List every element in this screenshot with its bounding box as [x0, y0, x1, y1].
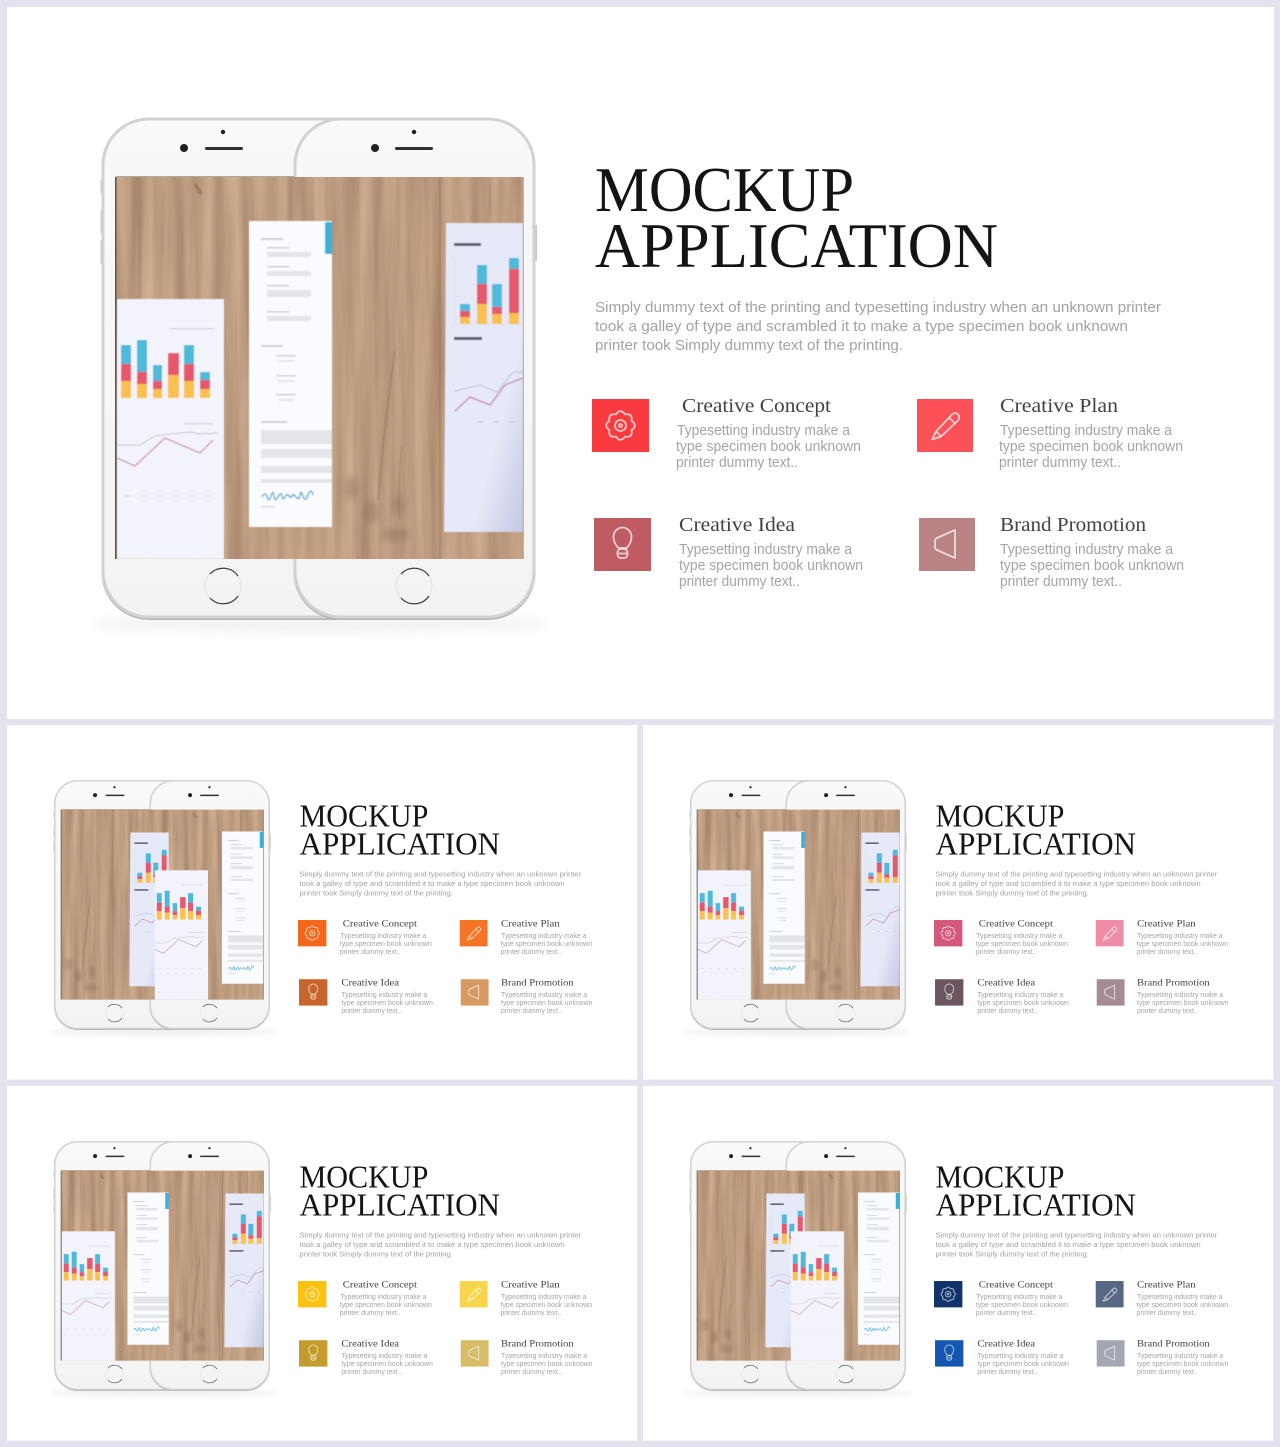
- item: creative plan: Typesetting industry make a: [501, 931, 587, 940]
- intro text: printer took Simply dummy text of the printing.: [300, 889, 453, 898]
- intro text: took a galley of type and scrambled it to make a type specimen book unknown: [936, 1240, 1201, 1249]
- item: creative plan: printer dummy text..: [501, 947, 561, 956]
- title: MOCKUP: [936, 798, 1064, 833]
- title: MOCKUP: [300, 1159, 428, 1194]
- intro text: Simply dummy text of the printing and typesetting industry when an unknown printer: [595, 299, 1161, 316]
- icon: gear: [298, 920, 326, 946]
- icon: light bulb: [935, 979, 963, 1006]
- item: creative concept: [340, 1279, 432, 1317]
- icon: light bulb: [935, 1340, 963, 1367]
- item: creative plan: [501, 1279, 592, 1317]
- item: creative plan: Typesetting industry make a: [1137, 1292, 1223, 1301]
- intro text: Simply dummy text of the printing and typesetting industry when an unknown printer: [300, 1231, 582, 1240]
- item: brand promotion: Typesetting industry make a: [1000, 542, 1174, 558]
- item: creative idea: printer dummy text..: [679, 574, 800, 590]
- intro text: Simply dummy text of the printing and typesetting industry when an unknown printer: [936, 1231, 1218, 1240]
- item: creative plan: type specimen book unknown: [1137, 939, 1228, 948]
- item: creative idea: [341, 978, 433, 1015]
- item: brand promotion: printer dummy text..: [1137, 1367, 1198, 1376]
- item: creative idea: Typesetting industry make a: [341, 990, 427, 999]
- item: creative idea: Typesetting industry make a: [977, 990, 1063, 999]
- item: creative idea: printer dummy text..: [341, 1006, 402, 1015]
- item: brand promotion: printer dummy text..: [1137, 1006, 1198, 1015]
- item: creative plan: type specimen book unknown: [999, 439, 1183, 455]
- item: creative idea: type specimen book unknown: [341, 998, 433, 1007]
- item: creative idea: Creative Idea: [679, 515, 795, 536]
- item: creative plan: Creative Plan: [501, 918, 560, 929]
- item: creative idea: Typesetting industry make a: [341, 1351, 427, 1360]
- icon: pencil: [1096, 920, 1124, 946]
- item: creative concept: printer dummy text..: [976, 1308, 1037, 1317]
- item: creative concept: type specimen book unknown: [340, 1300, 432, 1309]
- intro text: took a galley of type and scrambled it to make a type specimen book unknown: [936, 879, 1201, 888]
- item: brand promotion: [501, 978, 593, 1015]
- panel: pink slide: [643, 725, 1273, 1080]
- item: creative concept: type specimen book unknown: [976, 939, 1068, 948]
- item: creative plan: Creative Plan: [501, 1279, 560, 1290]
- item: creative plan: Creative Plan: [1137, 918, 1196, 929]
- item: creative idea: Creative Idea: [977, 978, 1036, 989]
- icon: megaphone: [919, 518, 975, 571]
- intro text: [936, 870, 1218, 898]
- title: [936, 798, 1136, 861]
- item: creative concept: Typesetting industry make a: [976, 931, 1062, 940]
- item: brand promotion: Brand Promotion: [1137, 1339, 1210, 1350]
- item: brand promotion: Typesetting industry make a: [1137, 990, 1223, 999]
- intro text: printer took Simply dummy text of the printing.: [300, 1250, 453, 1259]
- item: creative concept: Typesetting industry make a: [677, 423, 851, 439]
- intro text: printer took Simply dummy text of the printing.: [936, 1250, 1089, 1259]
- item: brand promotion: [1137, 978, 1229, 1015]
- item: creative plan: printer dummy text..: [999, 455, 1121, 471]
- item: creative concept: Creative Concept: [979, 1279, 1053, 1290]
- item: creative concept: Creative Concept: [682, 396, 832, 417]
- item: creative plan: [999, 396, 1183, 471]
- item: creative idea: Typesetting industry make a: [679, 542, 853, 558]
- item: creative concept: Creative Concept: [343, 1279, 417, 1290]
- icon: megaphone: [1097, 1340, 1125, 1367]
- icon: pencil: [1096, 1281, 1124, 1307]
- item: creative concept: type specimen book unknown: [676, 439, 861, 455]
- phone mockup pair: [0, 781, 357, 1036]
- item: creative idea: [679, 515, 863, 590]
- item: creative concept: Typesetting industry make a: [340, 931, 426, 940]
- intro text: printer took Simply dummy text of the printing.: [936, 889, 1089, 898]
- item: creative plan: Typesetting industry make a: [1137, 931, 1223, 940]
- item: brand promotion: type specimen book unknown: [501, 1359, 593, 1368]
- item: creative plan: printer dummy text..: [501, 1308, 561, 1317]
- item: brand promotion: Brand Promotion: [1000, 515, 1146, 536]
- icon: pencil: [460, 1281, 488, 1307]
- icon: megaphone: [461, 979, 489, 1006]
- item: creative plan: type specimen book unknown: [1137, 1300, 1228, 1309]
- item: creative idea: printer dummy text..: [341, 1367, 402, 1376]
- icon: gear: [298, 1281, 326, 1307]
- item: creative concept: Creative Concept: [343, 918, 417, 929]
- intro text: took a galley of type and scrambled it to make a type specimen book unknown: [300, 1240, 565, 1249]
- item: brand promotion: type specimen book unknown: [501, 998, 593, 1007]
- item: creative concept: printer dummy text..: [676, 455, 798, 471]
- intro text: took a galley of type and scrambled it to make a type specimen book unknown: [595, 318, 1128, 335]
- item: creative plan: type specimen book unknown: [501, 1300, 592, 1309]
- item: creative plan: printer dummy text..: [1137, 947, 1197, 956]
- intro text: [595, 299, 1161, 354]
- item: brand promotion: [1000, 515, 1184, 590]
- item: creative plan: Creative Plan: [1000, 396, 1118, 417]
- item: creative plan: [501, 918, 592, 956]
- icon: gear: [592, 399, 649, 452]
- item: creative plan: Typesetting industry make a: [501, 1292, 587, 1301]
- item: brand promotion: printer dummy text..: [501, 1367, 562, 1376]
- item: brand promotion: type specimen book unknown: [1137, 998, 1229, 1007]
- item: creative concept: Typesetting industry make a: [340, 1292, 426, 1301]
- icon: light bulb: [594, 518, 651, 571]
- item: brand promotion: Brand Promotion: [501, 978, 574, 989]
- intro text: [300, 1231, 582, 1259]
- item: creative concept: [976, 1279, 1068, 1317]
- intro text: [300, 870, 582, 898]
- panel: navy slide: [588, 1086, 1273, 1441]
- phone mockup pair: [683, 781, 914, 1036]
- icon: light bulb: [299, 979, 327, 1006]
- item: brand promotion: Typesetting industry make a: [1137, 1351, 1223, 1360]
- icon: light bulb: [299, 1340, 327, 1367]
- intro text: Simply dummy text of the printing and typesetting industry when an unknown printer: [300, 870, 582, 879]
- item: creative idea: type specimen book unknown: [977, 998, 1069, 1007]
- item: creative concept: Typesetting industry make a: [976, 1292, 1062, 1301]
- item: brand promotion: type specimen book unknown: [1000, 558, 1184, 574]
- item: brand promotion: [1137, 1339, 1229, 1376]
- item: creative idea: [341, 1339, 433, 1376]
- item: brand promotion: printer dummy text..: [1000, 574, 1122, 590]
- item: brand promotion: Brand Promotion: [1137, 978, 1210, 989]
- item: creative plan: [1137, 1279, 1228, 1317]
- item: creative idea: Creative Idea: [341, 978, 400, 989]
- title: APPLICATION: [300, 1187, 500, 1222]
- item: brand promotion: Typesetting industry make a: [501, 1351, 587, 1360]
- item: creative concept: printer dummy text..: [340, 1308, 401, 1317]
- title: MOCKUP: [595, 154, 854, 225]
- item: brand promotion: printer dummy text..: [501, 1006, 562, 1015]
- title: [595, 154, 998, 281]
- item: creative idea: type specimen book unknown: [341, 1359, 433, 1368]
- item: creative concept: printer dummy text..: [976, 947, 1037, 956]
- item: creative plan: [1137, 918, 1228, 956]
- item: brand promotion: Typesetting industry make a: [501, 990, 587, 999]
- intro text: took a galley of type and scrambled it to make a type specimen book unknown: [300, 879, 565, 888]
- item: creative idea: Typesetting industry make a: [977, 1351, 1063, 1360]
- icon: pencil: [460, 920, 488, 946]
- item: creative plan: type specimen book unknown: [501, 939, 592, 948]
- icon: megaphone: [1097, 979, 1125, 1006]
- item: creative concept: printer dummy text..: [340, 947, 401, 956]
- item: creative plan: Creative Plan: [1137, 1279, 1196, 1290]
- panel: yellow slide: [7, 1086, 637, 1441]
- intro text: printer took Simply dummy text of the printing.: [595, 337, 903, 354]
- title: MOCKUP: [300, 798, 428, 833]
- item: creative idea: printer dummy text..: [977, 1006, 1038, 1015]
- item: creative idea: Creative Idea: [977, 1339, 1036, 1350]
- title: [300, 1159, 500, 1222]
- item: creative concept: Creative Concept: [979, 918, 1053, 929]
- title: APPLICATION: [595, 210, 998, 281]
- panel: orange slide: [0, 725, 637, 1080]
- item: creative idea: type specimen book unknown: [679, 558, 863, 574]
- title: APPLICATION: [300, 826, 500, 861]
- phone mockup pair: [88, 119, 552, 632]
- item: creative plan: Typesetting industry make a: [1000, 423, 1173, 439]
- title: [936, 1159, 1136, 1222]
- item: brand promotion: [501, 1339, 593, 1376]
- phone mockup pair: [47, 1142, 278, 1397]
- title: [300, 798, 500, 861]
- title: APPLICATION: [936, 1187, 1136, 1222]
- item: creative idea: type specimen book unknown: [977, 1359, 1069, 1368]
- item: creative idea: Creative Idea: [341, 1339, 400, 1350]
- item: creative idea: [977, 978, 1069, 1015]
- item: creative concept: [340, 918, 432, 956]
- item: creative concept: type specimen book unknown: [340, 939, 432, 948]
- item: creative concept: type specimen book unknown: [976, 1300, 1068, 1309]
- title: APPLICATION: [936, 826, 1136, 861]
- item: creative concept: [676, 396, 861, 471]
- item: creative plan: printer dummy text..: [1137, 1308, 1197, 1317]
- icon: gear: [934, 920, 962, 946]
- icon: gear: [934, 1281, 962, 1307]
- intro text: [936, 1231, 1218, 1259]
- title: MOCKUP: [936, 1159, 1064, 1194]
- panel: main red slide: [7, 7, 1274, 719]
- item: brand promotion: type specimen book unknown: [1137, 1359, 1229, 1368]
- item: brand promotion: Brand Promotion: [501, 1339, 574, 1350]
- icon: megaphone: [461, 1340, 489, 1367]
- icon: pencil: [917, 399, 973, 452]
- item: creative idea: printer dummy text..: [977, 1367, 1038, 1376]
- item: creative concept: [976, 918, 1068, 956]
- item: creative idea: [977, 1339, 1069, 1376]
- intro text: Simply dummy text of the printing and typesetting industry when an unknown printer: [936, 870, 1218, 879]
- phone mockup pair: [588, 1142, 993, 1397]
